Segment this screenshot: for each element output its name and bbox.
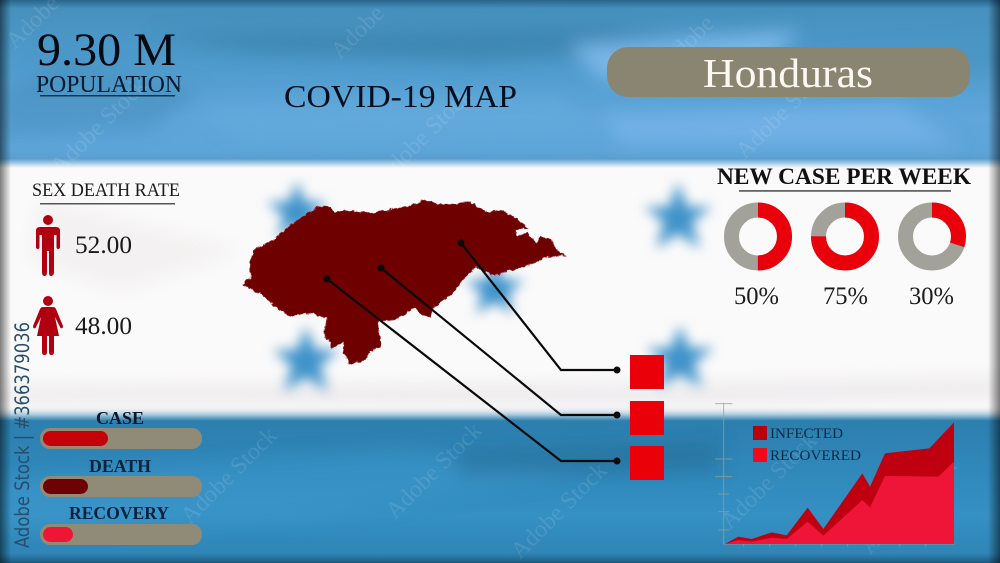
watermarks: Adobe Stock <box>381 418 487 524</box>
watermarks: Adobe <box>656 11 719 74</box>
watermarks: Adobe <box>326 1 389 64</box>
progress bars panel <box>40 408 202 545</box>
recovered area <box>725 462 954 544</box>
death bar <box>40 456 202 497</box>
death bar: DEATH <box>89 456 151 476</box>
case bar: CASE <box>96 408 144 428</box>
chart legend: INFECTED <box>770 426 843 442</box>
country name pill: Honduras <box>703 50 873 96</box>
watermarks: Adobe Stock <box>371 83 477 189</box>
female rate value: 48.00 <box>75 313 132 340</box>
donut percentage labels: 30% <box>909 283 954 310</box>
red region markers <box>630 355 664 480</box>
infected area <box>725 422 954 544</box>
watermarks: Adobe Stock <box>176 423 282 529</box>
recovery bar: RECOVERY <box>69 503 169 523</box>
country name pill <box>607 47 970 97</box>
map title: COVID-19 MAP <box>284 78 517 114</box>
watermarks: Adobe Stock <box>716 428 822 534</box>
watermarks: Adobe Stock <box>46 73 152 179</box>
watermarks: Adobe Stock <box>876 263 982 369</box>
stock id watermark: Adobe Stock | #366379036 <box>11 322 34 548</box>
chart axes <box>715 403 955 547</box>
icon: male figure <box>36 215 60 276</box>
watermarks: Adobe Stock <box>731 58 837 164</box>
map of Honduras <box>243 200 565 364</box>
sex death rate panel <box>32 180 180 355</box>
population figure <box>36 24 182 98</box>
watermarks: Adobe Stock <box>171 168 277 274</box>
watermarks: Adobe Stock <box>856 453 962 559</box>
recovery bar <box>40 503 202 545</box>
panel heading: NEW CASE PER WEEK <box>717 164 972 190</box>
male rate value: 52.00 <box>75 232 132 259</box>
donut chart 50% <box>732 210 784 263</box>
chart legend <box>753 426 861 464</box>
case bar <box>40 408 202 449</box>
population figure: 9.30 M <box>37 24 176 76</box>
watermarks: Adobe Stock <box>211 248 317 354</box>
watermarks: Adobe Stock <box>541 253 647 359</box>
new case per week panel <box>717 164 972 310</box>
population figure: POPULATION <box>36 72 182 98</box>
donut chart 75% <box>818 210 872 263</box>
sex death rate heading: SEX DEATH RATE <box>32 180 180 201</box>
watermarks: Adobe Stock <box>506 458 612 563</box>
donut percentage labels: 50% <box>734 283 779 310</box>
donut chart 30% <box>906 210 958 263</box>
chart legend: RECOVERED <box>770 448 861 464</box>
area chart <box>715 403 955 547</box>
icon: female figure <box>33 296 63 355</box>
donut percentage labels: 75% <box>823 283 868 310</box>
donut percentage labels <box>734 283 954 310</box>
connector lines with markers <box>324 240 620 464</box>
